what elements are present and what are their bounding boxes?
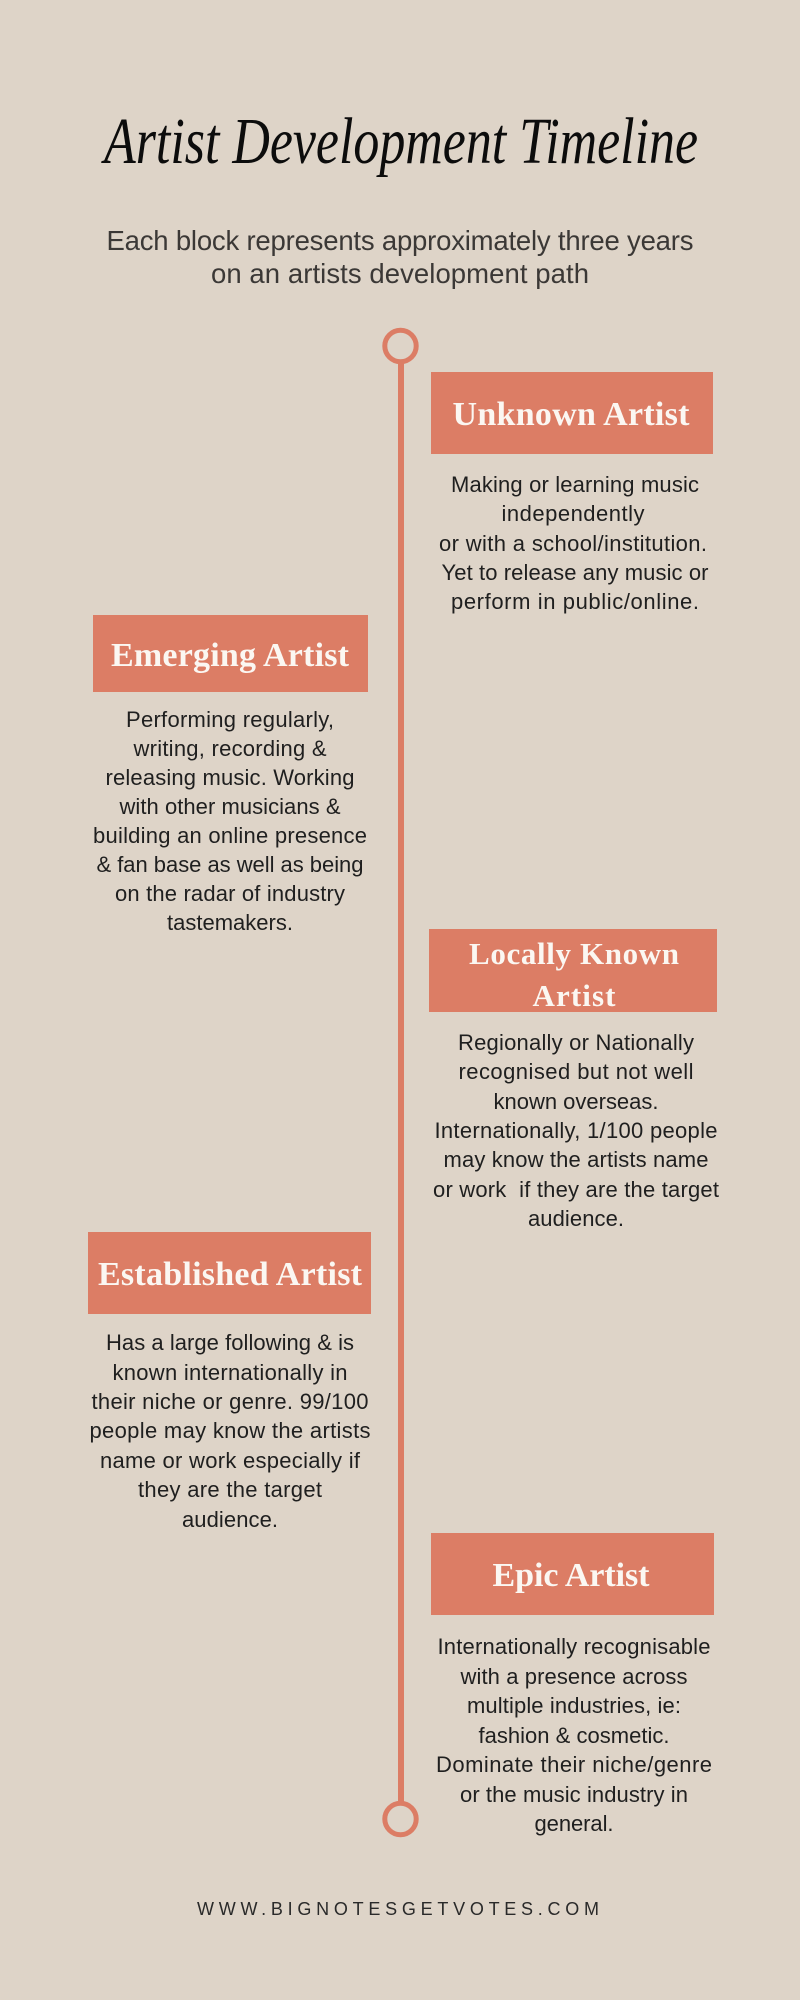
panel: Emerging Artist bbox=[93, 615, 368, 935]
text: Unknown Artist description: Yet to release any music or bbox=[442, 560, 708, 585]
text: Epic Artist description: general. bbox=[534, 1811, 614, 1836]
text: Established Artist description: audience. bbox=[182, 1507, 278, 1532]
heading box: Established Artist bbox=[88, 1232, 371, 1314]
text: Emerging Artist description: writing, recording & bbox=[132, 736, 327, 761]
text: Epic Artist description: or the music industry in bbox=[460, 1782, 688, 1807]
text: Locally Known Artist description: may know the artists name bbox=[444, 1147, 708, 1172]
panel: Epic Artist bbox=[431, 1533, 714, 1836]
text: Emerging Artist description bbox=[93, 707, 367, 935]
heading box: Locally Known Artist: Locally Known bbox=[469, 936, 679, 971]
text: Established Artist description bbox=[90, 1330, 370, 1532]
icon: timeline end circle bbox=[385, 1803, 416, 1835]
panel: Established Artist bbox=[88, 1232, 371, 1532]
text: Unknown Artist description: or with a school/institution. bbox=[439, 531, 707, 556]
text: Epic Artist description: multiple industries, ie: bbox=[467, 1693, 681, 1718]
text: Locally Known Artist description: audience. bbox=[528, 1206, 624, 1231]
heading box: Emerging Artist: Emerging Artist bbox=[111, 637, 350, 674]
subtitle bbox=[106, 225, 694, 289]
text: Emerging Artist description: Performing regularly, bbox=[126, 707, 334, 732]
text: Emerging Artist description: on the radar of industry bbox=[115, 881, 345, 906]
subtitle: Each block represents approximately three years bbox=[106, 225, 694, 256]
panel: Unknown Artist bbox=[431, 372, 713, 614]
text: Established Artist description: people may know the artists bbox=[90, 1418, 370, 1443]
heading box: Locally Known Artist: Artist bbox=[532, 978, 616, 1013]
timeline bbox=[385, 330, 416, 1835]
text: Emerging Artist description: tastemakers. bbox=[167, 910, 293, 935]
text: Established Artist description: known internationally in bbox=[112, 1360, 348, 1385]
text: Unknown Artist description: independently bbox=[502, 501, 644, 526]
icon: timeline start circle bbox=[385, 330, 416, 362]
text: Established Artist description: they are the target bbox=[138, 1477, 322, 1502]
heading box: Locally Known Artist bbox=[429, 929, 717, 1013]
text: Established Artist description: Has a large following & is bbox=[106, 1330, 354, 1355]
text: Epic Artist description: Dominate their niche/genre bbox=[436, 1752, 712, 1777]
heading box: Established Artist: Established Artist bbox=[98, 1256, 363, 1293]
text: Epic Artist description bbox=[436, 1634, 712, 1836]
text: Emerging Artist description: building an online presence bbox=[93, 823, 367, 848]
heading box: Epic Artist bbox=[431, 1533, 714, 1615]
text: Locally Known Artist description: or work if they are the target bbox=[433, 1177, 719, 1202]
text: Unknown Artist description: perform in public/online. bbox=[451, 589, 699, 614]
text: Unknown Artist description bbox=[439, 472, 708, 614]
text: Emerging Artist description: & fan base as well as being bbox=[96, 852, 364, 877]
text: Established Artist description: their niche or genre. 99/100 bbox=[92, 1389, 368, 1414]
heading box: Epic Artist: Epic Artist bbox=[492, 1557, 650, 1594]
text: Locally Known Artist description: Regionally or Nationally bbox=[458, 1030, 694, 1055]
panel: Locally Known Artist bbox=[429, 929, 719, 1231]
text: Epic Artist description: fashion & cosmetic. bbox=[478, 1723, 670, 1748]
heading box: Unknown Artist bbox=[431, 372, 713, 454]
text: Emerging Artist description: releasing music. Working bbox=[106, 765, 354, 790]
text: Unknown Artist description: Making or learning music bbox=[451, 472, 699, 497]
text: Established Artist description: name or work especially if bbox=[100, 1448, 361, 1473]
text: Locally Known Artist description: recognised but not well bbox=[458, 1059, 694, 1084]
text: Locally Known Artist description bbox=[433, 1030, 719, 1231]
text: Locally Known Artist description: Internationally, 1/100 people bbox=[434, 1118, 718, 1143]
heading box: Unknown Artist: Unknown Artist bbox=[452, 396, 690, 433]
text: Epic Artist description: with a presence across bbox=[460, 1664, 688, 1689]
heading box: Emerging Artist bbox=[93, 615, 368, 692]
subtitle: on an artists development path bbox=[211, 258, 589, 289]
text: Epic Artist description: Internationally recognisable bbox=[438, 1634, 710, 1659]
footer: website: WWW.BIGNOTESGETVOTES.COM bbox=[197, 1899, 599, 1919]
text: Emerging Artist description: with other musicians & bbox=[118, 794, 341, 819]
text: Locally Known Artist description: known overseas. bbox=[494, 1089, 658, 1114]
